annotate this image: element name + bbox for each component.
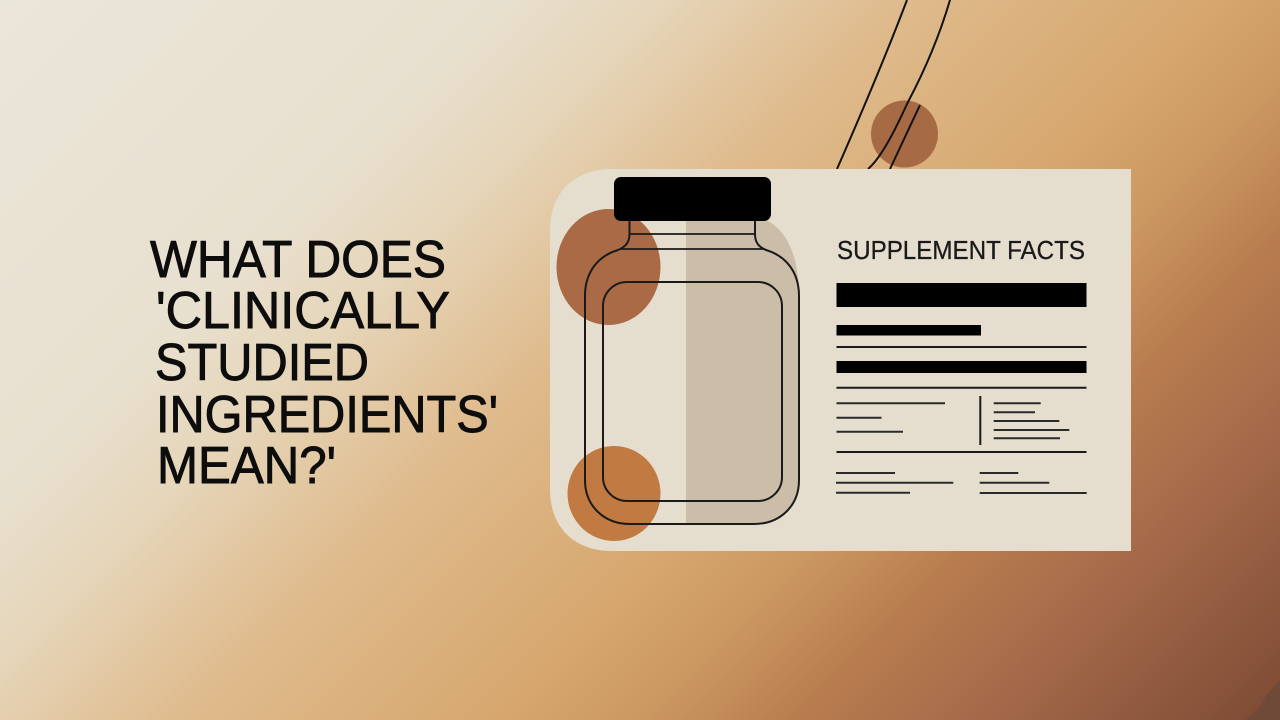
label heading: SUPPLEMENT FACTS [837, 235, 1085, 265]
bottom left text lines [836, 473, 953, 493]
title line 3: STUDIED [155, 334, 369, 392]
short line right [890, 105, 920, 169]
curved line middle [868, 0, 950, 169]
decorative top elements: circle and curved lines [837, 0, 950, 169]
brown circle [556, 209, 660, 325]
title [150, 231, 498, 495]
title line 1: WHAT DOES [150, 231, 446, 289]
jar lid [614, 177, 771, 221]
bottom right text lines [980, 473, 1087, 493]
supplement facts label [836, 235, 1087, 493]
orange circle [568, 446, 660, 541]
label rules [836, 347, 1086, 452]
icon: supplement jar [556, 177, 799, 541]
jar inner outline [603, 282, 782, 501]
jar neck line [630, 233, 755, 235]
corner texture [1245, 680, 1280, 720]
jar outer outline [585, 221, 799, 524]
left text lines [836, 403, 945, 432]
title line 5: MEAN?' [157, 437, 336, 495]
curved line left [837, 0, 907, 169]
card background [550, 169, 1131, 551]
panel: label card [550, 169, 1131, 551]
title line 2: 'CLINICALLY [156, 282, 450, 340]
right text lines [994, 403, 1069, 438]
title line 4: INGREDIENTS' [156, 386, 498, 444]
circle above card [871, 100, 938, 168]
label bars [836, 283, 1086, 373]
jar shoulder line [620, 248, 765, 250]
jar shaded half [686, 221, 799, 524]
